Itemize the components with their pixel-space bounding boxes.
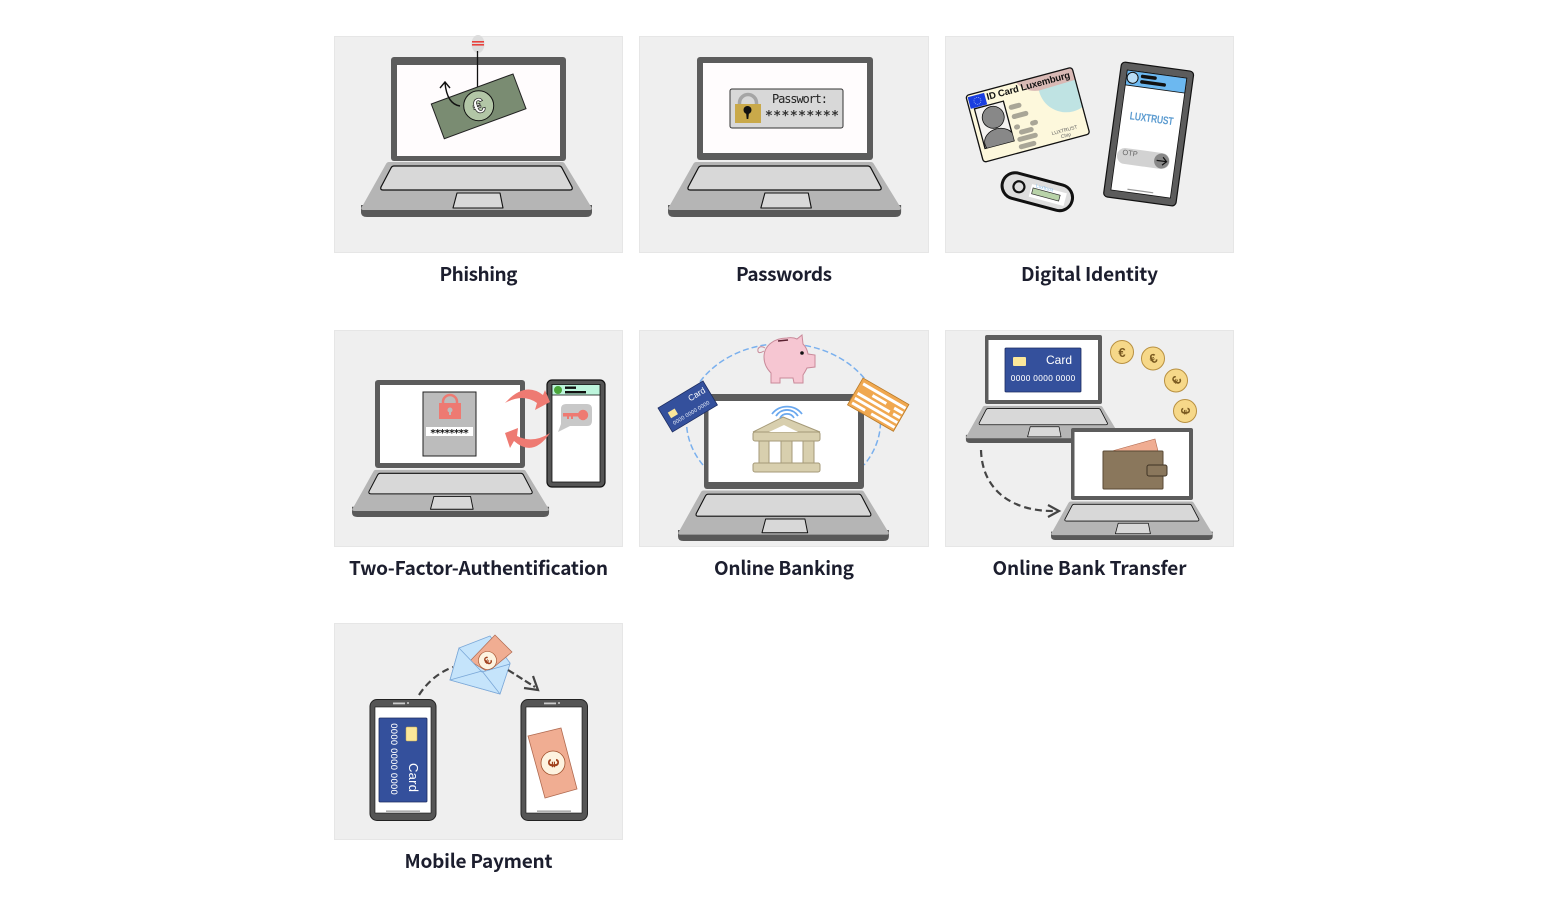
icon: laptop xyxy=(678,394,889,541)
icon: red padlock xyxy=(439,395,461,419)
icon: euro banknote xyxy=(431,74,526,139)
icon: phone with LuxTrust app: LUXTRUST xyxy=(1129,110,1174,129)
icon: phone with LuxTrust app: OTP xyxy=(1122,148,1138,159)
icon: sender laptop xyxy=(966,335,1121,443)
icon: ID card: ID Card Luxemburg xyxy=(985,70,1072,103)
icon: euro coins xyxy=(1110,340,1196,422)
icon: transfer form xyxy=(848,378,909,431)
panel: phishing xyxy=(334,35,622,287)
icon: hardware token xyxy=(999,170,1075,214)
icon: ID card: LUXTRUST xyxy=(1051,124,1078,137)
panel background xyxy=(640,330,928,546)
icon: sender phone xyxy=(370,700,436,820)
icon: ID card: Chip xyxy=(1060,132,1072,140)
icon: receiver phone xyxy=(521,700,588,820)
arrow: laptop to phone xyxy=(505,390,550,410)
bank card on screen: 0000 0000 0000 xyxy=(1010,374,1076,383)
icon: hardware token: Luxtrust xyxy=(1035,183,1054,194)
title: Digital Identity xyxy=(1021,260,1158,287)
banknote on phone: € xyxy=(546,758,563,767)
icon: wallet xyxy=(1103,439,1167,489)
icon: piggy bank xyxy=(758,335,815,383)
card on phone: 0000 0000 0000 xyxy=(388,723,398,795)
title: Online Bank Transfer xyxy=(992,554,1187,581)
panel background xyxy=(334,36,622,252)
text: masked password: ********* xyxy=(765,109,839,124)
title: Mobile Payment xyxy=(404,847,552,874)
icon: bank card xyxy=(658,381,717,432)
title: Two-Factor-Authentification xyxy=(349,554,608,581)
arrow: phone to laptop xyxy=(505,428,550,448)
icon: laptop xyxy=(352,380,549,517)
icon: receiver laptop xyxy=(1051,428,1213,540)
icon: bank card: 0000 0000 0000 xyxy=(672,400,711,427)
card on phone: Card xyxy=(406,763,421,792)
icon: laptop xyxy=(361,57,592,217)
panel: two-factor authentication xyxy=(334,330,622,581)
icon: bank building xyxy=(753,417,820,472)
panel: digital identity xyxy=(946,36,1234,287)
icon: euro coins: € xyxy=(1178,407,1193,415)
icon: euro coins: € xyxy=(1147,350,1160,367)
title: Phishing xyxy=(440,260,518,287)
icon: euro coins: € xyxy=(1168,373,1185,387)
icon: euro coins: € xyxy=(1118,345,1126,360)
icon: fishing line and float xyxy=(472,35,484,88)
icon: wifi signal xyxy=(772,407,802,418)
panel background xyxy=(334,624,622,840)
panel background xyxy=(334,330,622,546)
login form: ******** xyxy=(430,428,469,439)
login form xyxy=(423,392,476,456)
panel background xyxy=(946,330,1234,546)
panel: online bank transfer xyxy=(946,330,1234,581)
panel: mobile payment xyxy=(334,624,622,874)
icon: phone with LuxTrust app xyxy=(1103,62,1194,206)
icon: phone xyxy=(547,380,605,487)
arrow: dashed from envelope xyxy=(508,670,538,690)
icon: envelope with banknote xyxy=(450,635,512,694)
title: Passwords xyxy=(736,260,832,287)
bank card on screen: Card xyxy=(1046,353,1072,367)
icon: ID card xyxy=(966,67,1090,162)
password dialog xyxy=(730,89,843,128)
card on phone xyxy=(379,718,427,802)
panel: passwords xyxy=(640,36,928,287)
panel background xyxy=(946,36,1234,252)
icon: padlock xyxy=(735,94,761,123)
arrow: bill hooked upward xyxy=(440,82,460,106)
title: Online Banking xyxy=(714,554,855,581)
icon: key message bubble xyxy=(558,404,592,432)
dashed connection arc xyxy=(686,343,880,465)
icon: envelope with banknote: € xyxy=(480,654,496,668)
arrow: dashed to envelope xyxy=(419,667,453,695)
icon: bank card: Card xyxy=(686,385,707,403)
text: password label: Passwort: xyxy=(772,92,828,106)
panel: online banking xyxy=(640,330,928,581)
icon: laptop xyxy=(668,57,901,217)
bank card on screen xyxy=(1005,348,1081,392)
panel background xyxy=(640,36,928,252)
arrow: dashed transfer xyxy=(981,450,1059,517)
icon: euro banknote: € xyxy=(470,94,489,119)
